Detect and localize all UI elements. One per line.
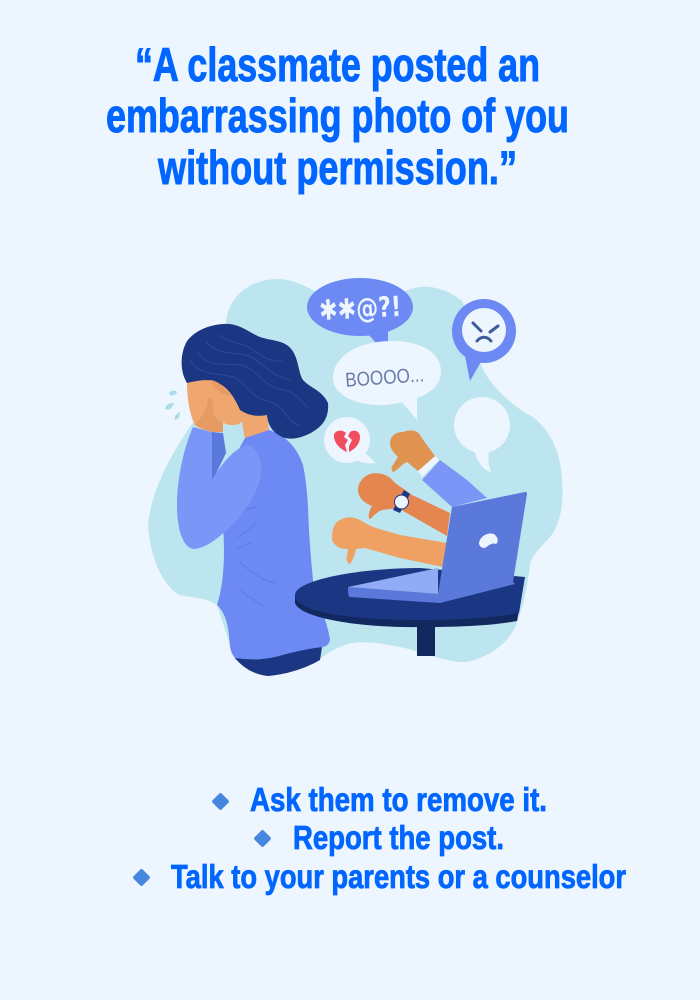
- title: without permission.”: [157, 141, 517, 194]
- bullet 1: Ask them to remove it.: [250, 781, 547, 818]
- illustration: cyberbullying scene: [148, 278, 562, 676]
- middle arm: [358, 473, 450, 536]
- bullet 2: Report the post.: [293, 819, 504, 856]
- speech bubble: symbols: [307, 278, 413, 356]
- tears: [165, 390, 180, 420]
- hair: [182, 324, 328, 439]
- hand shadow: [195, 397, 223, 432]
- speech bubble: angry face: [452, 299, 516, 381]
- hair strands: [190, 335, 307, 426]
- title: [106, 38, 569, 194]
- cuff: [418, 456, 439, 477]
- inner arm: [212, 432, 226, 482]
- speech bubble: symbols: ✱✱@?!: [318, 290, 402, 327]
- speech bubble: empty: [454, 397, 510, 472]
- background blob: [148, 279, 562, 664]
- neck: [240, 410, 269, 439]
- speech bubble: boo: BOOOO...: [345, 364, 425, 392]
- sleeve of top arm: [422, 460, 487, 507]
- top thumbs-down hand: [390, 430, 435, 472]
- pants: [235, 647, 322, 676]
- title: “A classmate posted an: [135, 38, 540, 91]
- table: [295, 568, 525, 656]
- sleeve arm: [177, 427, 261, 549]
- speech bubble: boo: [333, 341, 441, 420]
- title: embarrassing photo of you: [106, 89, 569, 142]
- action list: [132, 781, 626, 895]
- speech bubble: broken heart: [324, 417, 376, 463]
- laptop: [348, 492, 527, 603]
- face and hand: [187, 378, 243, 432]
- shirt body: [217, 430, 330, 660]
- ear: [210, 380, 230, 396]
- watch: [393, 490, 410, 513]
- shirt wrinkles: [206, 500, 275, 607]
- lower arm: [332, 517, 447, 567]
